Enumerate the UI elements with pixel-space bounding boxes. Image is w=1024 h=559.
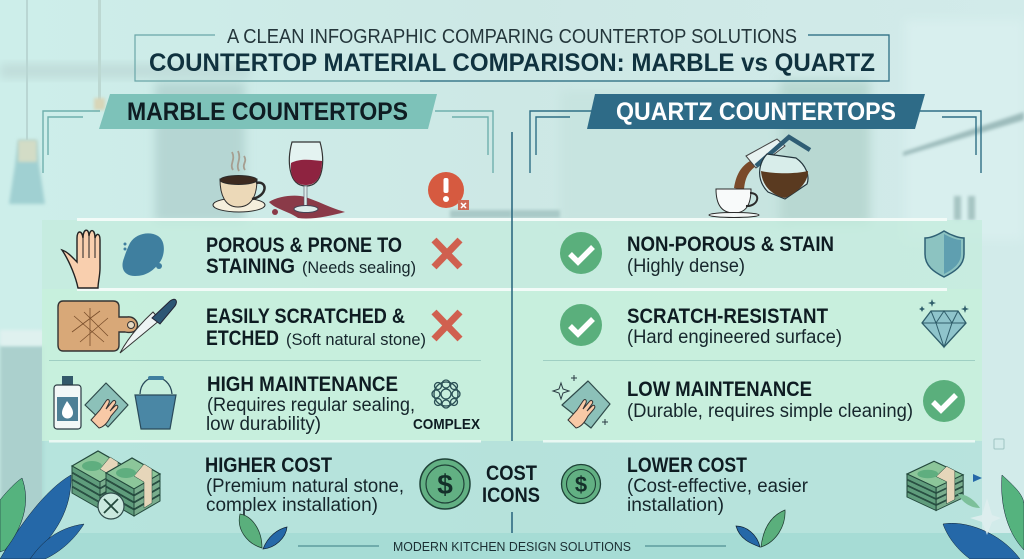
- text: cost: [205, 454, 404, 516]
- icon: dollar coin: [420, 459, 470, 509]
- icon: shield: [925, 231, 964, 277]
- text: low maintenance: (Durable, requires simple cleaning): [627, 401, 913, 422]
- marble header: [43, 94, 493, 173]
- text: maintenance: low durability): [206, 414, 321, 435]
- marble row 4: cost: [72, 451, 470, 519]
- quartz row 1: non-porous: [560, 231, 964, 277]
- label: cost icons: COST: [486, 462, 537, 485]
- icon: check: [560, 232, 602, 274]
- text: non-porous: NON-POROUS & STAIN: [627, 233, 834, 256]
- quartz row 2: scratch resistant: [560, 299, 969, 348]
- marble header: MARBLE COUNTERTOPS: [127, 98, 408, 126]
- icon: knife: [120, 299, 176, 353]
- text: low maintenance: [627, 378, 913, 422]
- icon: coffee pot pouring into cup: [709, 137, 810, 218]
- text: lower cost: [627, 454, 809, 516]
- text: cost: HIGHER COST: [205, 454, 332, 477]
- icon: dollar coin: $: [575, 472, 587, 497]
- decoration: center-right leaves: [736, 510, 785, 547]
- quartz row 4: lower cost: [562, 454, 963, 516]
- text: porous: STAINING: [206, 255, 295, 278]
- label: cost icons: [482, 462, 540, 507]
- text: non-porous: (Highly dense): [627, 256, 745, 277]
- text: scratch resistant: SCRATCH-RESISTANT: [627, 305, 828, 328]
- icon: diamond: [919, 299, 969, 347]
- icon: money stack: [907, 461, 963, 511]
- icon: check: [560, 304, 602, 346]
- marble row 1: porous: [62, 230, 460, 288]
- marble row 3: maintenance: [54, 373, 480, 435]
- icon: hand wiping cloth: [85, 383, 128, 428]
- icon: x mark: [434, 312, 460, 339]
- icon: x mark: [434, 240, 460, 267]
- marble row 2: scratched: [58, 299, 460, 353]
- icon: cleaner bottle: [54, 376, 81, 429]
- icon: check: [923, 380, 965, 422]
- text: porous: (Needs sealing): [302, 258, 416, 277]
- decoration: right leaves and sparkle: [943, 439, 1024, 559]
- decoration: left leaves: [0, 475, 84, 559]
- panels: comparison rows: [0, 218, 1024, 559]
- text: lower cost: installation): [627, 495, 724, 516]
- title block: A CLEAN INFOGRAPHIC COMPARING COUNTERTOP SOLUTIONS: [227, 26, 797, 48]
- icon: cutting board: [58, 301, 137, 351]
- title block: COUNTERTOP MATERIAL COMPARISON: MARBLE vs QUARTZ: [149, 49, 875, 77]
- text: cost: complex installation): [206, 495, 378, 516]
- icon: bucket: [135, 376, 176, 429]
- icon: wine glass with spill: [269, 142, 345, 219]
- text: non-porous: [627, 233, 834, 277]
- text: scratch resistant: [627, 305, 842, 348]
- text: scratched: EASILY SCRATCHED &: [206, 305, 405, 328]
- text: porous: POROUS & PRONE TO: [206, 234, 402, 257]
- quartz header: QUARTZ COUNTERTOPS: [616, 98, 896, 126]
- icon: money stacks: [72, 451, 160, 519]
- icon: coffee cup: [213, 151, 265, 212]
- text: maintenance: HIGH MAINTENANCE: [207, 373, 398, 396]
- title block: [135, 26, 889, 81]
- text: maintenance: (Requires regular sealing,: [207, 395, 415, 416]
- icon: hand: [62, 230, 100, 288]
- footer: MODERN KITCHEN DESIGN SOLUTIONS: [393, 539, 631, 554]
- text: scratched: ETCHED: [206, 327, 279, 350]
- icon: dollar coin: [562, 464, 600, 504]
- text: cost: (Premium natural stone,: [206, 476, 404, 497]
- text: lower cost: (Cost-effective, easier: [627, 476, 809, 497]
- icon: hand wiping cloth: [553, 375, 610, 428]
- decoration: center-left leaves: [239, 514, 287, 549]
- quartz header: [530, 94, 981, 173]
- center divider: [511, 132, 513, 533]
- label: cost icons: ICONS: [482, 484, 540, 507]
- icon: dollar coin: $: [437, 469, 453, 500]
- icon: complex network: [432, 380, 460, 408]
- text: scratched: [206, 305, 426, 350]
- icon: alert: [428, 172, 469, 210]
- text: porous: [206, 234, 416, 278]
- label: complex: COMPLEX: [413, 416, 480, 433]
- text: low maintenance: LOW MAINTENANCE: [627, 378, 812, 401]
- text: lower cost: LOWER COST: [627, 454, 747, 477]
- text: scratched: (Soft natural stone): [286, 330, 426, 349]
- text: scratch resistant: (Hard engineered surface): [627, 327, 842, 348]
- quartz row 3: low maintenance: [553, 375, 965, 428]
- icon: water stain: [122, 233, 164, 276]
- text: maintenance: [206, 373, 415, 435]
